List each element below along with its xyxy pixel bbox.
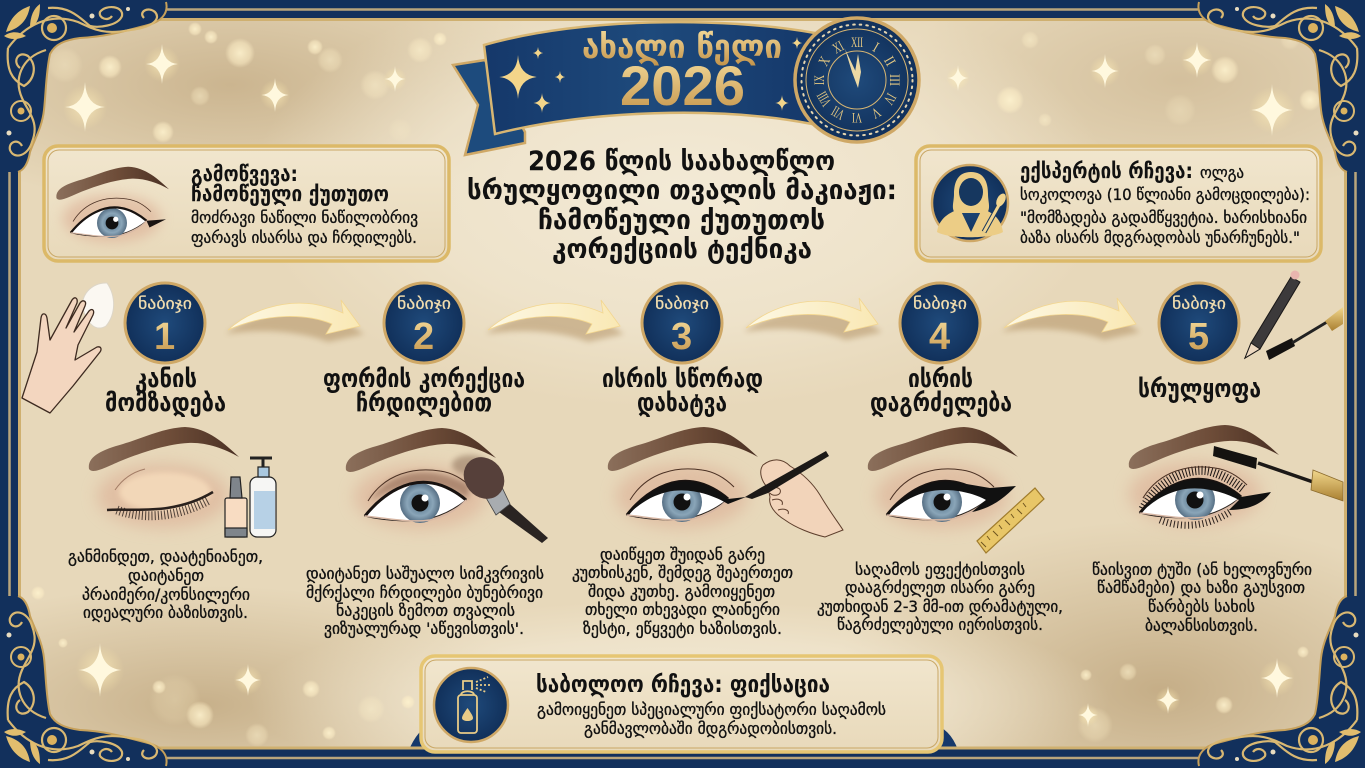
step 5 title: სრულყოფა [1138,374,1261,403]
title: სრულყოფილი თვალის მაკიაჟი: [467,175,897,206]
title [467,146,897,265]
step 2 badge [384,283,464,363]
final tip text: საბოლოო რჩევა: ფიქსაცია [536,672,830,698]
step 3 text: კუთხისკენ, შემდეგ შეაერთეთ [572,563,793,582]
clock: I [870,40,881,56]
expert text: ბაზა ისარს მდგრადობას უნარჩუნებს." [1020,228,1300,247]
cause text [191,162,418,247]
panel: expert tip [916,146,1321,261]
title: ჩამოწეული ქუთუთოს [538,205,825,236]
title: 2026 წლის საახალწლო [528,146,835,177]
step 5 text [1092,560,1312,635]
step 3 text: დაიწყეთ შუიდან გარე [600,545,765,564]
icon: mascara [1213,446,1343,501]
clock [795,18,919,142]
step 2 text: ნაკეცის ზემოთ თვალის [336,601,515,620]
clock: VI [852,109,862,125]
panel: cause [44,146,449,261]
step 2 badge: ნაბიჯი [397,294,451,313]
expert text: "მომზადება გადამწყვეტია. ხარისხიანი [1020,208,1307,227]
arrow 2 to 3 [486,300,624,342]
clock: XII [851,35,863,51]
step 3 title [602,364,763,417]
step 5 text: წარბებს სახის [1148,597,1255,616]
step 1 badge: 1 [154,316,175,358]
step 2 text [306,564,544,638]
clock: V [868,103,883,121]
step 2 eye [346,428,496,529]
step 4 text [817,560,1063,634]
step 1 text [68,547,263,622]
arrow 3 to 4 [744,298,882,340]
icon: mascara wand [1266,307,1343,360]
step 5 badge: 5 [1188,316,1209,358]
clock: XI [830,39,847,57]
cause text: მოძრავი ნაწილი ნაწილობრივ [191,208,418,227]
step 4 text: კუთხიდან 2-3 მმ-ით დრამატული, [817,597,1063,616]
banner tail [453,60,525,155]
step 3 [572,283,843,638]
cause text: ფარავს ისარსა და ჩრდილებს. [191,228,417,247]
banner heading: ახალი წელი [582,27,782,66]
step 1 [22,283,276,622]
clock: VII [829,102,848,122]
cause text: ჩამოწეული ქუთუთო [191,182,389,206]
arrow 1 to 2 [226,300,364,342]
panel: final tip [421,656,942,752]
expert text: ოლგა [1200,163,1244,182]
icon: pencil [1245,270,1300,358]
icon: make-up artist [932,165,1008,241]
step 5 eye [1129,425,1279,526]
step 2 text: ვიზუალურად 'აწევისთვის'. [324,619,524,638]
clock: X [816,54,834,69]
step 4 badge: ნაბიჯი [913,294,967,313]
step 5 text: წაისვით ტუში (ან ხელოვნური [1092,560,1312,579]
banner year: 2026 [620,54,745,117]
step 1 title: მომზადება [105,388,226,417]
step 5 text: ბალანსისთვის. [1145,616,1258,635]
step 4 text: დააგრძელეთ ისარი გარე [845,578,1035,597]
step 4 title: დაგრძელება [870,388,1012,417]
arrow 4 to 5 [1002,298,1140,340]
step 1 badge: ნაბიჯი [138,294,192,313]
final tip text: განმავლობაში მდგრადობისთვის. [584,719,837,738]
step 5 badge [1159,283,1239,363]
expert text: სოკოლოვა (10 წლიანი გამოცდილება): [1020,185,1310,204]
step 2 text: მქრქალი ჩრდილები ბუნებრივი [306,583,543,602]
step 2 [306,283,548,638]
step 1 closed eye [89,427,239,528]
step 1 title [105,364,226,417]
icon: hand with cotton pad [22,283,114,413]
step 1 text: განმინდეთ, დაატენიანეთ, [68,547,263,566]
step 2 title: ფორმის კორექცია [323,364,525,393]
clock: IV [880,90,898,107]
icon: setting spray [434,668,508,742]
step 3 badge: ნაბიჯი [655,294,709,313]
final tip text: გამოიყენეთ სპეციალური ფიქსატორი საღამოს [537,700,886,719]
icon: hand with eyeliner [745,451,843,537]
step 4 badge [900,283,980,363]
step 1 title: კანის [135,364,197,393]
clock: IX [812,75,828,85]
step 2 badge: 2 [413,316,434,358]
banner ribbon [484,22,815,134]
step 2 text: დაიტანეთ საშუალო სიმკვრივის [306,564,544,583]
step 3 text: ზესტი, ეწყვეტი ხაზისთვის. [583,619,782,638]
step 1 text: პრაიმერი/კონსილერი [82,585,250,604]
step 3 title: ისრის სწორად [602,364,763,393]
banner [453,22,815,155]
clock: II [880,54,898,69]
final tip text [536,672,886,738]
clock: VIII [815,88,835,109]
step 4 badge: 4 [929,316,950,358]
step 2 title [323,364,525,417]
icon: ruler [977,488,1044,553]
step 1 text: დაიტანეთ [128,566,204,585]
title: კორექციის ტექნიკა [552,234,812,265]
step 4 title [870,364,1012,417]
step 4 text: წაგრძელებული იერისთვის. [837,615,1043,634]
step 4 eye [868,427,1018,528]
icon: hooded eye [56,167,169,242]
step 4 text: საღამოს ეფექტისთვის [855,560,1025,579]
step 5 [1092,270,1343,635]
step 1 text: იდეალური ბაზისთვის. [83,603,248,622]
step 3 text: შიდა კუთხე. გამოიყენეთ [588,582,775,601]
clock: III [886,74,902,86]
banner sparkles [499,37,802,113]
step 3 text [572,545,793,638]
icon: primer and lotion [225,458,276,537]
step 3 text: თხელი თხევადი ლაინერი [585,600,780,619]
step 3 badge: 3 [671,316,692,358]
step 5 badge: ნაბიჯი [1172,294,1226,313]
icon: make-up brush [455,449,548,543]
step 3 title: დახატვა [637,388,727,417]
step 4 title: ისრის [908,364,973,393]
step 3 badge [642,283,722,363]
expert text [1020,159,1310,247]
cause text: გამოწვევა: [191,162,298,186]
step 1 badge [125,283,205,363]
step 3 eye [608,427,758,528]
expert text: ექსპერტის რჩევა: [1020,159,1193,183]
step 5 text: წამწამები) და ხაზი გაუსვით [1097,578,1305,597]
step 4 [817,283,1063,634]
step 2 title: ჩრდილებით [356,388,492,417]
